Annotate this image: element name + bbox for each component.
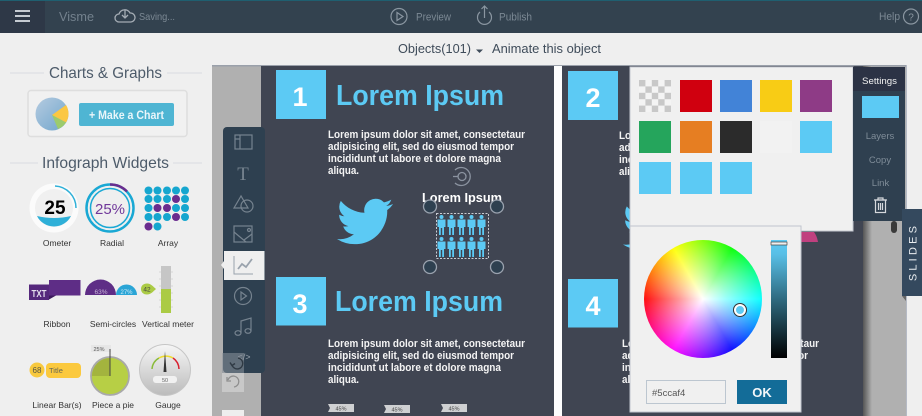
icon: twitter bird xyxy=(337,199,393,244)
left sidebar: charts and graphs: + Make a Chart xyxy=(89,110,164,122)
swatch popover xyxy=(630,67,853,231)
percentage ribbons: 45% xyxy=(335,406,347,412)
slide panel: right page xyxy=(562,66,863,416)
left sidebar: charts and graphs xyxy=(10,65,202,136)
slides tab xyxy=(902,209,922,301)
icon: image xyxy=(234,226,252,242)
section 3 heading: Lorem Ipsum xyxy=(335,286,503,318)
widget: vertical meter: Vertical meter xyxy=(142,319,194,329)
section 1 heading: Lorem Ipsum xyxy=(336,80,504,112)
widget: linear bars: Linear Bar(s) xyxy=(32,400,82,410)
section 2 body text xyxy=(619,130,817,178)
widget: linear bars xyxy=(30,362,82,410)
left sidebar: infograph widgets xyxy=(10,155,202,410)
top navigation bar: Publish xyxy=(499,12,532,24)
widget: array xyxy=(144,186,189,248)
section 2 body text: Lorem ipsum dolor sit amet, consectetaur xyxy=(619,130,817,142)
settings panel: Settings xyxy=(862,76,897,87)
undo button xyxy=(222,373,244,392)
canvas background xyxy=(212,65,907,416)
icon: shapes xyxy=(234,196,253,212)
widget: radial: Radial xyxy=(100,238,124,248)
section 3 body text: Lorem ipsum dolor sit amet, consectetaur xyxy=(328,338,526,350)
hex input: #5ccaf4 xyxy=(652,388,685,399)
transparent swatch xyxy=(639,80,671,112)
section 3 number: 3 xyxy=(292,289,308,319)
colour picker popover xyxy=(630,226,801,412)
section 2 number: 2 xyxy=(585,83,601,113)
widget: semi-circles: 63% xyxy=(94,289,108,296)
section 1 body text: incididunt ut labore et dolore magna xyxy=(328,153,502,165)
top navigation bar: ? xyxy=(908,12,914,24)
icon: music xyxy=(235,318,251,335)
icon: twitter bird fragment xyxy=(623,204,679,250)
section 3 body text: incididunt ut labore et dolore magna xyxy=(328,362,502,374)
settings panel: Link xyxy=(872,178,889,189)
section 4 body text xyxy=(622,338,820,386)
top navigation bar: Help xyxy=(879,11,900,23)
left sidebar: charts and graphs: Charts & Graphs xyxy=(49,65,162,82)
object toolbar: Animate this object xyxy=(492,41,601,56)
OK button: OK xyxy=(752,385,772,400)
section 3 number xyxy=(276,277,326,326)
widget: array: Array xyxy=(158,238,179,248)
left sidebar: infograph widgets: Infograph Widgets xyxy=(42,155,169,172)
section 2 body text: incididunt ut labore et dolore magna xyxy=(619,154,793,166)
redo button xyxy=(222,353,244,373)
widget: semi-circles: 27% xyxy=(120,290,133,296)
section 1 body text xyxy=(328,129,526,177)
settings panel: Copy xyxy=(869,155,891,166)
section 4 body text: Lorem ipsum dolor sit amet, consectetaur xyxy=(622,338,820,350)
zoom control xyxy=(222,410,244,416)
icon: chart tab xyxy=(221,251,264,280)
settings panel xyxy=(853,67,905,221)
section 1 body text: adipisicing elit, sed do eiusmod tempor xyxy=(328,141,515,153)
selected people widget xyxy=(422,191,504,274)
icon: layout xyxy=(235,135,252,149)
icon: video xyxy=(234,288,252,304)
widget: radial: 25% xyxy=(95,201,125,218)
widget: vertical meter xyxy=(141,266,194,329)
section 2 body text: aliqua. xyxy=(619,166,650,178)
object toolbar: Objects(101) xyxy=(398,41,471,56)
section 1 number: 1 xyxy=(292,82,308,112)
settings panel: Layers xyxy=(866,131,895,142)
section 4 number: 4 xyxy=(585,291,601,321)
slide panel: left page xyxy=(261,66,562,416)
widget: ometer: 25 xyxy=(44,198,66,219)
widget: ribbon: TXT xyxy=(32,289,46,300)
widget: ribbon xyxy=(29,280,80,329)
widget: piece a pie: Piece a pie xyxy=(92,400,134,410)
widget: gauge xyxy=(140,344,190,410)
widget: radial xyxy=(86,184,134,248)
top navigation bar: Preview xyxy=(416,12,451,24)
percentage ribbons: 45% xyxy=(448,406,460,412)
left tool rail xyxy=(221,127,265,373)
widget: gauge: 50 xyxy=(162,378,168,384)
section 2 body text: adipisicing elit, sed do eiusmod tempor xyxy=(619,142,806,154)
OK button xyxy=(737,380,787,404)
slides tab: SLIDES xyxy=(908,223,920,281)
widget: vertical meter: 42 xyxy=(143,286,151,294)
section 1 body text: Lorem ipsum dolor sit amet, consectetaur xyxy=(328,129,526,141)
top navigation bar: Visme xyxy=(59,9,94,24)
section 1 number xyxy=(276,70,326,119)
widget: semi-circles: Semi-circles xyxy=(90,319,136,329)
object toolbar xyxy=(398,41,601,56)
icon: embed code: </> xyxy=(237,352,251,362)
colour swatches xyxy=(639,80,832,194)
section 4 body text: aliqua. xyxy=(622,374,653,386)
widget: ometer xyxy=(30,184,78,248)
section 4 number xyxy=(568,279,618,328)
icon: rotate handle xyxy=(453,168,470,186)
widget: linear bars: Title xyxy=(49,366,63,375)
percentage ribbons: 45% xyxy=(391,408,403,414)
colour wheel xyxy=(644,240,762,358)
top navigation bar: Saving... xyxy=(139,11,175,23)
icon: trash xyxy=(874,198,887,212)
selected people widget: Lorem Ipsum xyxy=(422,191,502,205)
widget: gauge: Gauge xyxy=(155,400,181,410)
widget: ribbon: Ribbon xyxy=(44,319,71,329)
widget: piece a pie xyxy=(91,345,134,410)
widget: piece a pie: 25% xyxy=(93,347,105,353)
widget: linear bars: 68 xyxy=(33,366,42,375)
section 2 number xyxy=(568,71,618,120)
section 3 body text: adipisicing elit, sed do eiusmod tempor xyxy=(328,350,515,362)
section 4 body text: adipisicing elit, sed do eiusmod tempor xyxy=(622,350,809,362)
percentage ribbons xyxy=(328,404,467,414)
widget: ometer: Ometer xyxy=(43,238,71,248)
section 4 body text: incididunt ut labore et dolore magna xyxy=(622,362,796,374)
brightness slider xyxy=(771,240,787,358)
widget: semi-circles xyxy=(85,280,137,329)
scroll handle xyxy=(891,221,897,233)
top navigation bar xyxy=(0,0,922,33)
hex input xyxy=(646,380,726,404)
section 3 body text xyxy=(328,338,526,386)
icon: text: T xyxy=(237,164,249,185)
section 3 body text: aliqua. xyxy=(328,374,359,386)
section 1 body text: aliqua. xyxy=(328,165,359,177)
pink tag fragment xyxy=(795,232,818,242)
